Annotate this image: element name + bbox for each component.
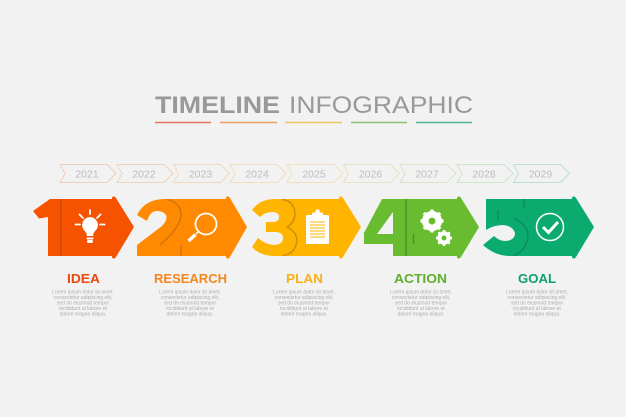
icon: magnifier xyxy=(188,214,216,241)
year 2025 xyxy=(287,164,343,182)
step 2 arrow xyxy=(137,196,247,259)
text block: plan: dolore magna aliqua. xyxy=(281,312,327,318)
column: action xyxy=(390,272,452,318)
year timeline xyxy=(60,164,570,182)
column: research xyxy=(154,272,227,318)
year 2027: 2027 xyxy=(415,168,439,180)
text block: goal xyxy=(506,290,568,318)
text block: goal: incididunt ut labore et xyxy=(513,306,561,312)
text block: plan: consectetur adipiscing elit, xyxy=(275,295,333,301)
column: plan xyxy=(273,272,335,318)
year 2026: 2026 xyxy=(359,168,382,180)
text block: action: sed do eiusmod tempor xyxy=(395,300,447,306)
year 2023 xyxy=(174,164,230,182)
title: TIMELINE xyxy=(155,92,280,119)
step 5 arrow xyxy=(483,196,594,259)
column: idea xyxy=(52,272,114,318)
heading: goal: GOAL xyxy=(518,272,556,286)
text block: action: Lorem ipsum dolor sit amet, xyxy=(390,290,452,296)
text block: research xyxy=(159,290,221,318)
text block: idea: consectetur adipiscing elit, xyxy=(54,295,112,301)
title underlines xyxy=(155,122,472,124)
text block: action: dolore magna aliqua. xyxy=(398,312,444,318)
text block: goal: sed do eiusmod tempor xyxy=(511,300,563,306)
step 4 arrow xyxy=(364,196,479,259)
year 2028 xyxy=(457,164,513,182)
year 2024: 2024 xyxy=(245,168,269,180)
column: goal xyxy=(506,272,568,318)
icon: clipboard xyxy=(306,209,329,244)
text block: research: sed do eiusmod tempor xyxy=(164,300,216,306)
text block: research: Lorem ipsum dolor sit amet, xyxy=(159,290,221,296)
text block: idea: dolore magna aliqua. xyxy=(60,312,106,318)
title xyxy=(155,92,473,119)
year 2024 xyxy=(230,164,286,182)
text block: action xyxy=(390,290,452,318)
title: INFOGRAPHIC xyxy=(289,92,473,119)
heading: action: ACTION xyxy=(394,272,447,286)
year 2022 xyxy=(117,164,173,182)
text block: goal: consectetur adipiscing elit, xyxy=(508,295,566,301)
icon: gears xyxy=(420,210,452,246)
text block: goal: dolore magna aliqua. xyxy=(514,312,560,318)
year 2028: 2028 xyxy=(472,168,496,180)
text block: plan: incididunt ut labore et xyxy=(280,306,328,312)
text block: idea xyxy=(52,290,114,318)
text block: research: incididunt ut labore et xyxy=(166,306,214,312)
year 2021 xyxy=(60,164,116,182)
text block: action: incididunt ut labore et xyxy=(397,306,445,312)
text block: idea: Lorem ipsum dolor sit amet, xyxy=(52,290,114,296)
text block: action: consectetur adipiscing elit, xyxy=(392,295,450,301)
text block: plan xyxy=(273,290,335,318)
year 2029: 2029 xyxy=(529,168,552,180)
heading: plan: PLAN xyxy=(286,272,323,286)
text block: plan: Lorem ipsum dolor sit amet, xyxy=(273,290,335,296)
year 2029 xyxy=(514,164,570,182)
year 2021: 2021 xyxy=(75,168,99,180)
year 2022: 2022 xyxy=(132,168,156,180)
year 2025: 2025 xyxy=(302,168,326,180)
heading: idea: IDEA xyxy=(67,272,100,286)
text block: research: consectetur adipiscing elit, xyxy=(161,295,219,301)
year 2026 xyxy=(344,164,400,182)
step 1 arrow xyxy=(33,196,134,259)
text block: research: dolore magna aliqua. xyxy=(167,312,213,318)
heading: research: RESEARCH xyxy=(154,272,227,286)
text block: idea: sed do eiusmod tempor xyxy=(57,300,109,306)
year 2023: 2023 xyxy=(189,168,212,180)
step 3 arrow xyxy=(252,196,361,259)
text block: plan: sed do eiusmod tempor xyxy=(278,300,330,306)
text block: goal: Lorem ipsum dolor sit amet, xyxy=(506,290,568,296)
year 2027 xyxy=(400,164,456,182)
icon: light bulb xyxy=(76,210,104,243)
icon: check circle xyxy=(536,214,564,240)
text block: idea: incididunt ut labore et xyxy=(59,306,107,312)
